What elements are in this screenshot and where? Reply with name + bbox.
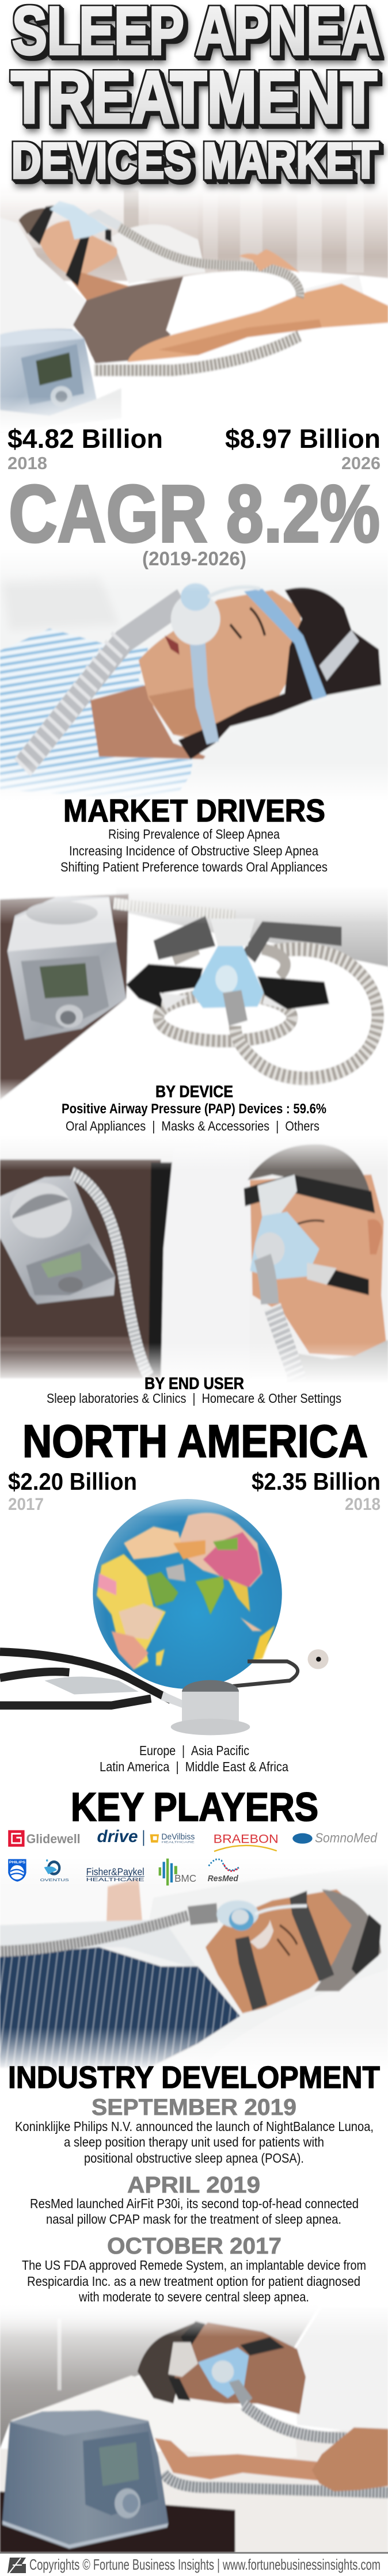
arm (127, 284, 388, 362)
title (11, 0, 379, 189)
development: April 2019 (30, 2172, 359, 2227)
logo: DeVilbiss Healthcare: DeVilbiss (161, 1832, 195, 1842)
section: by device (62, 1083, 326, 1133)
face (250, 1174, 386, 1356)
logo: Philips (8, 1859, 26, 1882)
photo: man sleeping on side beside blue CPAP machine (0, 2303, 388, 2576)
CAGR period: (2019-2026) (142, 548, 246, 570)
stat: 2018 north america: 2018 (345, 1495, 381, 1514)
white shirt (295, 2308, 388, 2436)
logo: Oventus (40, 1859, 70, 1882)
straps (181, 2321, 206, 2350)
logo: Drive: drive (97, 1827, 138, 1846)
logo: Oventus: OVENTUS (40, 1878, 70, 1882)
logos: key players (8, 1827, 378, 1886)
hair (178, 588, 381, 759)
heading: market drivers (60, 793, 328, 874)
shirt (73, 277, 183, 363)
stat: 2017 north america: $2.20 Billion (8, 1468, 137, 1495)
straps (290, 1891, 334, 1981)
logo: ResMed: ResMed (208, 1874, 239, 1884)
development: September 2019: positional obstructive sleep apnea (POSA). (84, 2151, 304, 2166)
end user categories: Sleep laboratories & Clinics | Homecare & Other Settings (47, 1391, 341, 1406)
tube upper (119, 227, 300, 298)
PAP share: Positive Airway Pressure (PAP) Devices : 59.6% (62, 1101, 326, 1117)
arms (155, 2438, 322, 2481)
development: October 2017: with moderate to severe central sleep apnea. (78, 2289, 309, 2304)
heading: key players: KEY PLAYERS (71, 1784, 318, 1829)
photo: man sleeping with CPAP in bed (0, 176, 388, 432)
tube coil (158, 994, 292, 1041)
other regions (100, 1743, 288, 1774)
logo: Philips: PHILIPS (9, 1861, 25, 1865)
hand (239, 249, 299, 273)
mask (50, 201, 109, 239)
africa (97, 1554, 166, 1669)
section: by end user: BY END USER (144, 1375, 244, 1393)
stat: 2017 north america: 2017 (8, 1495, 44, 1514)
photo: CPAP machine and mask on bed (0, 877, 388, 1139)
stethoscope (0, 1649, 329, 1735)
table (0, 2491, 235, 2552)
other regions: Latin America | Middle East & Africa (100, 1759, 288, 1774)
device (2, 2410, 168, 2544)
face (173, 2322, 306, 2414)
photo: older man with nasal CPAP mask (0, 1856, 388, 2159)
logo: DeVilbiss Healthcare (150, 1832, 195, 1844)
photo: woman with nasal CPAP mask (0, 547, 388, 882)
tube (263, 1257, 270, 1304)
stat: 2018 market value (7, 424, 163, 473)
middle east / iran (166, 1563, 185, 1581)
pillow (173, 688, 388, 817)
tube (0, 1916, 188, 1951)
straps (154, 916, 215, 960)
asia (178, 1513, 263, 1587)
logo: Glidewell: Glidewell (26, 1832, 81, 1846)
chest (90, 685, 213, 759)
pillow (198, 1969, 388, 2071)
blue strap (244, 589, 327, 700)
icon: Fortune Business Insights logo (7, 2558, 26, 2574)
driver list: Rising Prevalence of Sleep Apnea (108, 827, 280, 842)
mask (211, 919, 255, 946)
stat: 2026 market value: 2026 (341, 453, 381, 473)
nasal mask (216, 1900, 258, 1928)
stat: 2017 north america (8, 1468, 137, 1514)
driver list (60, 827, 328, 874)
driver list: Increasing Incidence of Obstructive Sleep Apnea (69, 843, 318, 858)
device (0, 1176, 115, 1304)
stat: 2026 market value: $8.97 Billion (225, 424, 381, 454)
development: April 2019: nasal pillow CPAP mask for the treatment of sleep apnea. (46, 2212, 341, 2227)
stat: 2018 market value: $4.82 Billion (7, 424, 163, 454)
logo: Fisher & Paykel Healthcare: HEALTHCARE (86, 1877, 144, 1882)
stat: 2018 north america (252, 1468, 381, 1514)
logo: ResMed (208, 1859, 239, 1884)
photo: globe with stethoscope (0, 1498, 329, 1735)
stat: 2026 market value (225, 424, 381, 473)
stat: 2018 market value: 2018 (7, 453, 47, 473)
logo: DeVilbiss Healthcare: HEALTHCARE (162, 1840, 195, 1844)
nasal cushion (171, 593, 220, 645)
driver list: Shifting Patient Preference towards Oral Appliances (60, 859, 328, 874)
tube lower (94, 336, 299, 370)
section: industry development (8, 2060, 380, 2304)
shirt (0, 1947, 240, 2068)
logo: Glidewell (8, 1830, 81, 1847)
india (196, 1576, 224, 1615)
logo: Fisher & Paykel Healthcare (86, 1866, 144, 1882)
mask (168, 2342, 198, 2377)
face (139, 590, 305, 743)
bed sheet (0, 2425, 388, 2552)
europe (124, 1527, 183, 1559)
development: September 2019: a sleep position therapy unit used for patients with (64, 2134, 324, 2149)
pillow (10, 2376, 297, 2460)
head (39, 220, 129, 300)
hair (138, 2321, 198, 2403)
development: April 2019: APRIL 2019 (127, 2172, 260, 2198)
photo: man wearing full face CPAP mask beside machine (0, 1135, 388, 1399)
device (0, 329, 97, 416)
striped shirt (0, 629, 193, 801)
logo: SomnoMed: SomnoMed (315, 1830, 378, 1845)
tube (22, 600, 183, 768)
tube (244, 2405, 347, 2438)
device (7, 896, 126, 1040)
logo: Braebon (214, 1832, 279, 1851)
other regions: Europe | Asia Pacific (139, 1743, 249, 1758)
tube left (72, 1173, 149, 1376)
section: by end user (47, 1375, 341, 1406)
indonesia / australia (240, 1618, 263, 1631)
logo: BMC: BMC (174, 1873, 196, 1884)
logo: SomnoMed (292, 1830, 378, 1845)
logo: Braebon: BRAEBON (214, 1832, 279, 1846)
device categories: Oral Appliances | Masks & Accessories | Others (66, 1118, 319, 1133)
heading: market drivers: MARKET DRIVERS (63, 793, 325, 828)
logo: BMC (159, 1859, 196, 1886)
tube back (114, 903, 235, 916)
strap (244, 1174, 375, 1213)
footer (7, 2556, 381, 2574)
hair (314, 1889, 381, 1991)
development: October 2017: OCTOBER 2017 (107, 2233, 282, 2259)
development: September 2019: SEPTEMBER 2019 (92, 2095, 296, 2120)
logo: Fisher & Paykel Healthcare: Fisher&Paykel (86, 1866, 144, 1877)
face (206, 1889, 371, 2013)
development: September 2019 (15, 2095, 374, 2166)
development: October 2017 (22, 2233, 366, 2304)
section: by device: BY DEVICE (155, 1083, 233, 1101)
mask frame (257, 1174, 297, 1222)
